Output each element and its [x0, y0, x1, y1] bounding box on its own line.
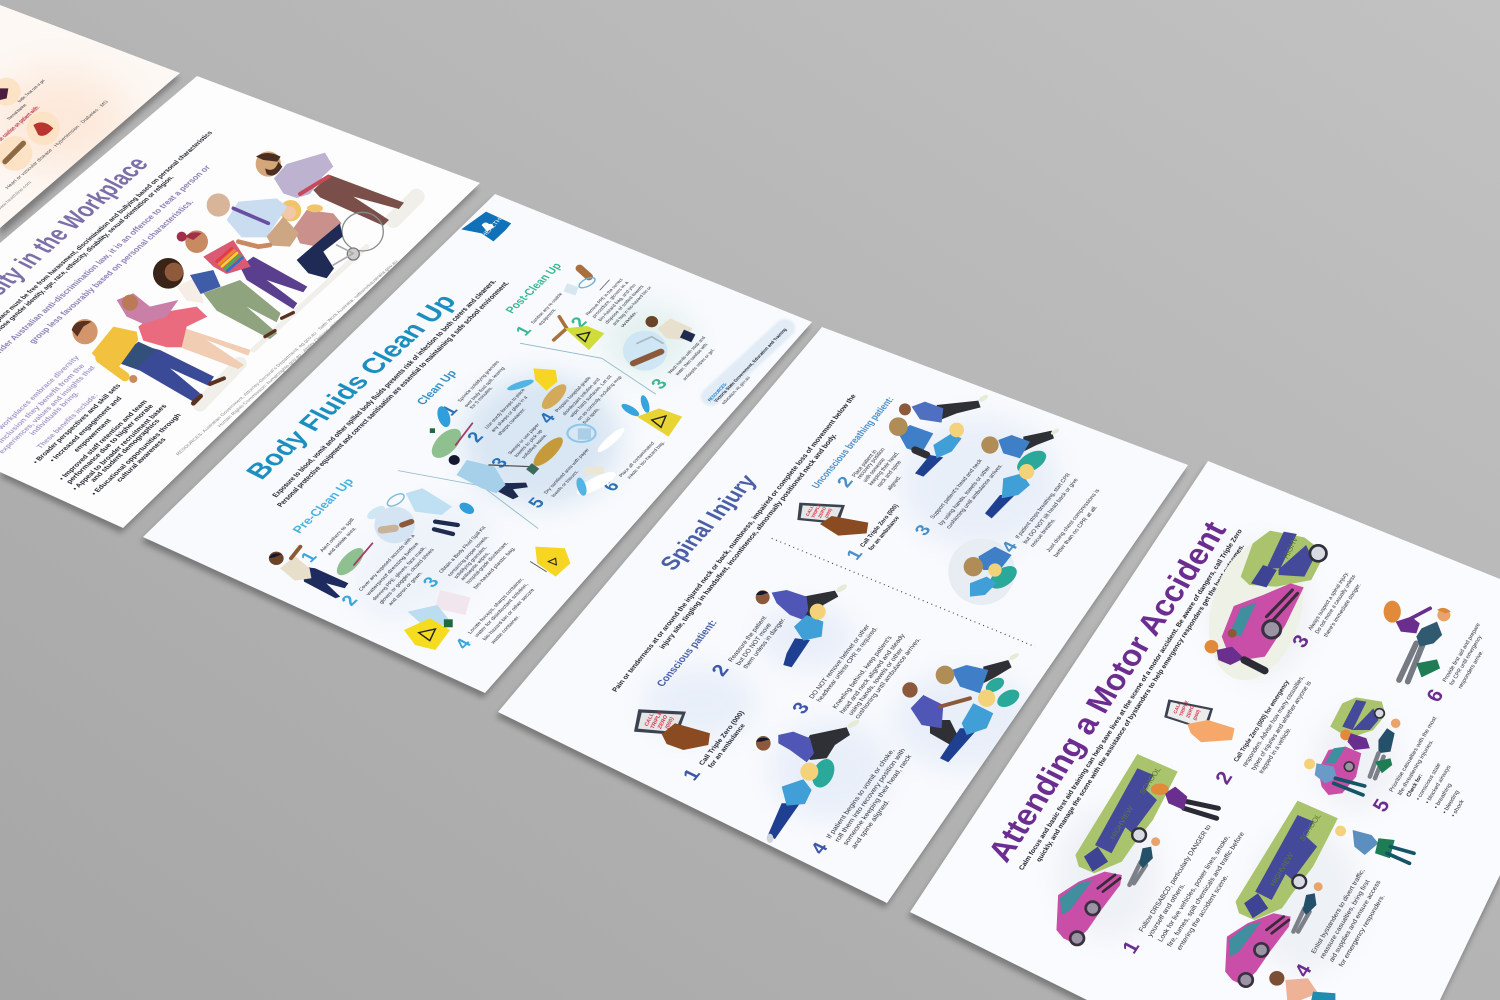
panel: pre-clean up: solidifying granules,	[453, 545, 489, 580]
icon: phone with peach hand: ZERO	[1185, 705, 1196, 719]
panel: post-clean up: equipment.	[537, 308, 557, 326]
panel: step 6: Provide first aid and prepare	[1442, 622, 1482, 683]
panel: clean up: towels to pick up	[513, 428, 544, 458]
panel: step 4	[1225, 801, 1414, 1000]
illustration: school bus	[1236, 801, 1338, 920]
panel: clean up	[415, 360, 682, 511]
panel: pre-clean up: gloves or goggles, closed shoes	[378, 547, 436, 605]
icon: glove and green spill	[430, 406, 474, 458]
benefits text: individuals bring.	[27, 390, 81, 437]
panel: post-clean up: 2	[566, 314, 591, 330]
poster: partial health poster (top left)	[0, 5, 180, 228]
icon: sharps bin	[530, 547, 570, 577]
panel: post-clean up: antiseptic wipes or gel.	[681, 348, 716, 381]
panel: step 3: 3	[1288, 632, 1314, 651]
panel: conscious patient: 2	[707, 661, 734, 680]
figure: man in beard and lilac sweater	[256, 151, 404, 226]
panel: step 5: • bleeding	[1442, 790, 1461, 815]
panel: step 6	[1384, 601, 1485, 706]
benefits text: These benefits include:	[34, 392, 100, 450]
panel: step 5	[1304, 697, 1466, 818]
panel: clean up: 5	[524, 495, 549, 511]
illustration: pink car	[1225, 913, 1291, 987]
panel: post-clean up: Remove PPE in the correct	[584, 277, 624, 316]
panel: pre-clean up: and apron or gown.	[387, 571, 425, 607]
panel: pre-clean up: and isolate area.	[326, 526, 358, 557]
panel: clean up: 2	[463, 429, 488, 445]
panel: conscious patient: 4	[806, 839, 833, 858]
panel: conscious patient: someone keeping their head, neck	[842, 753, 914, 847]
panel: clean up: wipe hard surfaces. Let sit	[569, 374, 613, 418]
icon: phone calling 000: ZERO	[817, 505, 827, 519]
panel: unconscious breathing patient: recovery position	[856, 447, 887, 480]
panel: step 2: 2	[1212, 768, 1237, 788]
illustration: crashed car and bus with rescuer	[1194, 530, 1326, 690]
panel: pre-clean up: donning PPE: gloves, face mask,	[371, 546, 428, 602]
illustration: first aider bending over bus	[1151, 784, 1218, 818]
dotted divider	[772, 538, 1035, 647]
panel: conscious patient: for an ambulance	[707, 723, 747, 769]
panel: pre-clean up: antiseptic wipes,	[459, 551, 492, 582]
panel: step 5: • conscious state	[1415, 762, 1443, 802]
panel: conscious patient: Reassure the patient	[727, 615, 768, 663]
benefits text: performance due to higher morale	[65, 404, 156, 485]
panel: step 1: Follow DRSABCD, particularly DANGER to	[1138, 824, 1213, 933]
panel: unconscious breathing patient: with someone	[862, 458, 887, 484]
title: Attending a Motor Accident	[980, 515, 1234, 867]
intro text: group less favourably based on personal characteristics.	[26, 198, 196, 345]
panel: clean up: Dry sanitised area with paper	[543, 447, 591, 494]
benefits text: • Improved staff retention and team	[58, 399, 149, 482]
icon: phone calling 000: CALL	[805, 504, 815, 517]
panel: step 4: aid supplies and ensure access	[1328, 879, 1382, 963]
panel: step 3	[1194, 530, 1363, 690]
icon: phone with peach hand: (000)	[1192, 709, 1202, 721]
figure: woman in wheelchair	[280, 200, 383, 278]
icon: person sweeping	[449, 455, 539, 499]
panel: step 5: Prioritise casualties with the most	[1389, 716, 1439, 793]
panel: resources: Victoria State Government, Education and Training	[713, 327, 788, 403]
figure: older man with tie	[207, 193, 299, 247]
illustration: supporting patient's head	[981, 428, 1060, 518]
panel: step 1	[1056, 754, 1246, 957]
panel: pre-clean up: Pre-Clean Up	[290, 476, 357, 535]
panel: unconscious breathing patient: neck and spine	[876, 460, 903, 488]
panel: clean up: disinfectant solution and	[561, 377, 601, 416]
panel: unconscious breathing patient: Place patient in	[851, 449, 879, 478]
panel: step 5: Check for:	[1406, 773, 1425, 798]
panel: step 1: entering the accident scene.	[1176, 874, 1230, 952]
panel: pre-clean up: containing proper towels,	[446, 535, 490, 578]
resources footer: RESOURCES: Australian Government, Attorney-General's Department: ag.gov.au · Safe Work Australia: safeworkaustralia.gov.au	[175, 259, 399, 456]
panel: unconscious breathing patient: Unconscious breathing patient:	[810, 395, 897, 490]
panel: post-clean up: procedure, gloves in a	[591, 280, 630, 318]
illustration: two rescuers with patient	[902, 652, 1022, 762]
poster: Spinal Injury	[498, 327, 1188, 903]
panel: conscious patient: Call Triple Zero (000)	[698, 710, 746, 767]
panel: conscious patient: headwear unless CPR is required.	[815, 626, 880, 703]
panel: step 3: Always suspect a spinal injury.	[1308, 571, 1351, 632]
panel: post-clean up: waste.	[619, 310, 639, 328]
icon: person washing hands	[623, 316, 695, 371]
panel: conscious patient: Conscious patient:	[655, 619, 720, 689]
panel: step 1: 1	[1119, 938, 1144, 957]
illustration: school bus: SCHOOL	[1138, 765, 1163, 796]
panel: pre-clean up: water for disinfectant solution,	[473, 582, 530, 638]
blue background hazes	[643, 417, 1060, 820]
panel: unconscious breathing patient: 2	[832, 473, 857, 490]
illustration: placing patient in recovery position	[889, 394, 989, 477]
panel: conscious patient: using hands, towels or other	[847, 647, 906, 717]
panel: conscious patient: Kneeling behind, keep patient's	[831, 635, 894, 710]
panel: conscious patient: 3	[788, 699, 815, 717]
panel: step 4: reassure casualties, bring first	[1319, 879, 1372, 960]
intro text: Personal protective equipment and correct sanitisation are essential to maintaining a safe school environment.	[275, 280, 511, 508]
panel: unconscious breathing patient: 4	[996, 537, 1022, 555]
panel: step 4: for emergency responders.	[1338, 893, 1387, 968]
panel: conscious patient: but DO NOT move	[735, 622, 774, 667]
panel: step 2: responders. Advise how many casualties,	[1241, 674, 1306, 768]
panel: pre-clean up: 1	[296, 549, 321, 565]
logo: health flag	[461, 212, 511, 241]
panel: pre-clean up: bio-hazard plastic bag.	[472, 546, 517, 590]
panel: clean up: fluid spots.	[582, 407, 601, 424]
panel: post-clean up: Post-Clean Up	[504, 261, 565, 315]
panel: unconscious breathing patient: Call Triple Zero (000)	[859, 503, 900, 548]
icon: phone calling 000	[797, 503, 868, 536]
panel: clean up: Place all contaminated	[618, 441, 656, 478]
benefits text: empowerment	[73, 418, 114, 453]
intro text: quickly, and manage the scene with the assistance of bystanders to help emergency responders get the best outcomes.	[1035, 543, 1246, 863]
panel: post-clean up	[504, 261, 716, 392]
panel: post-clean up: and bag in bio-hazard bin or	[611, 285, 653, 326]
panel: step 1: fire, fumes, spilt chemicals and traffic before	[1166, 831, 1246, 948]
panel: step 4: Enlist bystanders to divert traffic,	[1310, 867, 1367, 955]
panel: clean up: 3	[487, 455, 512, 471]
icon: phone with peach hand: CALL	[1173, 701, 1183, 715]
pale background hazes	[1064, 602, 1390, 966]
divider lines	[398, 343, 656, 528]
illustration: pink car	[1056, 872, 1122, 945]
panel: step 6: for CPR until emergency	[1449, 635, 1484, 687]
panel: unconscious breathing patient: better than no CPR at all.	[1053, 505, 1100, 558]
intro text: Pain or tenderness at or around the injured neck or back, numbness, impaired or complete loss of movement below the	[611, 393, 858, 693]
icon: phone calling 000	[634, 709, 710, 750]
panel: unconscious breathing patient: for an ambulance	[867, 515, 902, 552]
panel: clean up: Use sturdy forceps to place	[483, 388, 526, 429]
title: Body Fluids Clean Up	[239, 290, 463, 483]
illustration: recovery position	[756, 718, 860, 843]
illustration: school bus: HIGHVIEW	[1108, 804, 1135, 841]
icon: spill kit	[404, 590, 470, 650]
poster: partial health poster (top left): Heart or vascular disease · Hypertension · Diabetes · MS	[4, 99, 111, 190]
icon: phone calling 000: CALL	[644, 711, 656, 728]
panel: pre-clean up: Alert others to spill	[319, 518, 356, 553]
illustration: crashed car and bus with rescuer: HIGHV	[1281, 535, 1300, 560]
benefits text: • Appeal to broader recruitment bases	[71, 403, 169, 492]
logo: health flag: HEALTH	[480, 217, 504, 238]
icon: phone calling 000: ZERO	[657, 714, 669, 730]
figure: woman with curly hair and folder	[153, 258, 293, 339]
panel: step 1: yourself and others.	[1147, 882, 1187, 938]
icon: protective equipment	[365, 488, 476, 543]
illustration: school bus: HIGHVIEW	[1268, 851, 1295, 888]
title: Spinal Injury	[654, 471, 762, 574]
panel: pre-clean up: waste container.	[490, 615, 522, 645]
illustration: school bus: SCHOOL	[1298, 812, 1323, 843]
panel: step 2: trapped in a vehicle.	[1258, 726, 1293, 775]
panel: conscious patient: If patient begins to vomit or choke,	[825, 748, 897, 840]
panel: conscious patient: and spine aligned.	[850, 799, 892, 850]
panel: post-clean up: bio-hazard bag, and you	[597, 283, 637, 322]
panel: post-clean up: water, then sanitise with	[674, 342, 709, 376]
poster: Diversity in the Workplace	[0, 76, 480, 528]
panel: pre-clean up: Obtain a Body Fluid Spill Kit	[438, 525, 488, 574]
panel: pre-clean up: waterproof dressing before	[365, 542, 421, 597]
panel: pre-clean up: 4	[450, 636, 476, 652]
panel: post-clean up: 1	[511, 322, 536, 339]
panel: conscious patient: 1	[678, 766, 706, 784]
icon: phone calling 000: TRIPLE	[810, 503, 822, 519]
figure: woman in hijab	[117, 293, 251, 369]
intro text: injury site, tingling in hands/feet, incontinence, abnormally positioned neck and body.	[658, 432, 839, 650]
panel: step 4: 4	[1291, 960, 1317, 981]
panel: clean up: over body fluid spill, leaving	[463, 366, 506, 408]
icon: green fluid spill	[336, 542, 374, 576]
icon: phone with peach hand	[1164, 699, 1234, 742]
panel: conscious patient: roll them into recovery position with	[834, 747, 907, 843]
panel: clean up: Sprinkle solidifying granules	[456, 360, 501, 403]
panel: unconscious breathing patient: 1	[841, 546, 867, 563]
illustration: bystander	[1129, 837, 1160, 885]
intro text: Exposure to blood, vomit and other spilled body fluids presents risk of infection to both carers and cleaners.	[270, 278, 498, 499]
panel: step 6: 6	[1423, 686, 1449, 706]
benefits text: • Broader perspectives and skill sets	[32, 383, 123, 465]
panel: pre-clean up: 3	[418, 574, 443, 590]
panel: step 5: • breathing	[1433, 783, 1453, 810]
panel: pre-clean up: 2	[337, 592, 362, 609]
panel: unconscious breathing patient: but DO NOT tilt head back or give	[1022, 478, 1080, 545]
panel: pre-clean up: hospital-grade disinfectant,	[465, 541, 510, 585]
panel: unconscious breathing patient: 3	[909, 521, 935, 538]
panel: unconscious breathing patient: Just doing chest compressions is	[1046, 488, 1102, 553]
illustration: school bus	[1075, 754, 1178, 873]
panel: pre-clean up: bio-hazard bin or other secure	[482, 588, 537, 642]
panel: step 2	[1164, 674, 1313, 788]
illustration: bystander reassuring patient	[756, 583, 848, 667]
panel: unconscious breathing patient: cushioning until ambulance arrives.	[946, 463, 1005, 530]
panel: unconscious breathing patient	[797, 394, 1102, 605]
illustration: first aider treating bystander	[1384, 601, 1451, 682]
illustration: bystander directing	[1269, 826, 1414, 1000]
panel: clean up: Clean Up	[415, 369, 460, 407]
benefits text	[0, 354, 183, 497]
benefits text: • Educational opportunities through	[90, 413, 183, 497]
intro text: Calm focus and basic first aid training can help save lives at the scene of a motor accident. Be aware of dangers, call Triple Zero	[1018, 528, 1244, 872]
panel: step 2: Call Triple Zero (000) for emergency	[1233, 679, 1291, 763]
panel: step 2: types of injuries and whether anyone is	[1250, 680, 1313, 772]
panel: clean up: 4	[534, 410, 560, 426]
panel: step 5: life-threatening injuries.	[1397, 739, 1436, 797]
panel: step 3: there's immediate danger.	[1323, 582, 1363, 638]
poster: Body Fluids Clean Up	[143, 194, 812, 693]
icon: phone calling 000: TRIPLE	[650, 710, 664, 730]
panel: unconscious breathing patient: keeping their head,	[868, 451, 901, 487]
panel: conscious patient: DO NOT remove helmet or other	[808, 623, 872, 700]
panel: clean up: on as correctly, including mop	[576, 375, 623, 421]
panel: unconscious breathing patient: aligned.	[886, 475, 903, 492]
panel: conscious patient: cushioning until ambulance arrives.	[854, 636, 923, 720]
panel: conscious patient: head and neck aligned and steady	[839, 632, 907, 715]
panel: step 6: responders arrive.	[1458, 649, 1485, 690]
benefits text: • Increased engagement and	[49, 396, 124, 463]
panel: conscious patient: them unless in danger.	[742, 617, 788, 670]
panel: step 1: Look for live vehicles, power lines, smoke,	[1157, 834, 1232, 943]
panel: clean up: for 5 minutes.	[469, 386, 494, 409]
benefits text: and student demographics	[89, 418, 162, 483]
panel: step 5: 5	[1369, 796, 1395, 816]
panel: clean up: solidified waste.	[520, 433, 548, 459]
panel: post-clean up: dispose of soiled towels	[604, 284, 645, 324]
panel: step 3: Do not move a casualty unless	[1315, 574, 1357, 635]
panel: pre-clean up: Cover any exposed wounds with a	[358, 534, 417, 592]
panel: clean up: Prepare hospital-grade	[554, 375, 592, 413]
panel: step 5: • shock	[1451, 799, 1466, 818]
panel: clean up: sharps container.	[496, 407, 527, 436]
ground shadow under figures	[200, 197, 417, 405]
panel: post-clean up: Sanitise any re-usable	[530, 292, 564, 324]
poster: partial health poster (top left): bottle, Treat cuts or get	[16, 78, 46, 103]
panel: clean up: towels or tissues.	[550, 470, 580, 498]
panel: resources: RESOURCES:	[707, 382, 729, 402]
benefits text: cultural awareness	[115, 437, 168, 483]
panel: clean up: any sharps or glass in a	[490, 395, 529, 433]
panel: post-clean up: Wash hands with soap and	[667, 335, 707, 374]
panel: post-clean up: 3	[646, 376, 672, 392]
illustration: chest compressions	[948, 544, 1017, 605]
icon: brown fluid spills	[534, 384, 566, 466]
panel: unconscious breathing patient: If patient stops breathing, start CPR	[1015, 473, 1072, 540]
figure: man in yellow shirt	[72, 319, 224, 403]
panel: conscious patient	[634, 583, 1022, 858]
panel: step 5: • blocked airways	[1425, 765, 1453, 805]
icon: phone calling 000: (000)	[664, 716, 676, 730]
illustration: triage scene	[1304, 697, 1400, 795]
blue background blobs	[328, 303, 692, 645]
panel: unconscious breathing patient: rescue breaths.	[1030, 518, 1058, 548]
panel: unconscious breathing patient: Support patient's head and neck	[930, 459, 984, 520]
figure: woman with rainbow top	[177, 230, 307, 309]
panel: pre-clean up: Locate forceps, sharps container,	[467, 577, 525, 635]
panel: clean up: waste in bio-hazard bag.	[626, 441, 666, 479]
icon: green-yellow bag	[554, 317, 604, 350]
panel: clean up: 1	[437, 402, 462, 419]
icon: phone with peach hand: TRIPLE	[1178, 700, 1190, 717]
icon: person alerting others	[269, 547, 348, 598]
panel: resources: education.vic.gov.au	[720, 375, 751, 405]
panel: clean up: 6	[598, 478, 624, 494]
poster: partial health poster (top left): Thermal blanket	[5, 103, 28, 121]
icon: hand and goggles	[564, 268, 609, 295]
panel: pre-clean up	[269, 476, 570, 652]
resources footer: Human Rights Commission: humanrights.gov.au · Ability Options: abilityoptions.com.au	[216, 295, 369, 428]
icon: phone calling 000: (000)	[824, 507, 833, 519]
panel: unconscious breathing patient: by using hands, towels or other	[938, 465, 993, 527]
panel: clean up: Sweep or use paper	[507, 422, 541, 455]
poster: Attending a Motor Accident	[910, 461, 1500, 1000]
icon: gloves and bins	[506, 368, 682, 498]
